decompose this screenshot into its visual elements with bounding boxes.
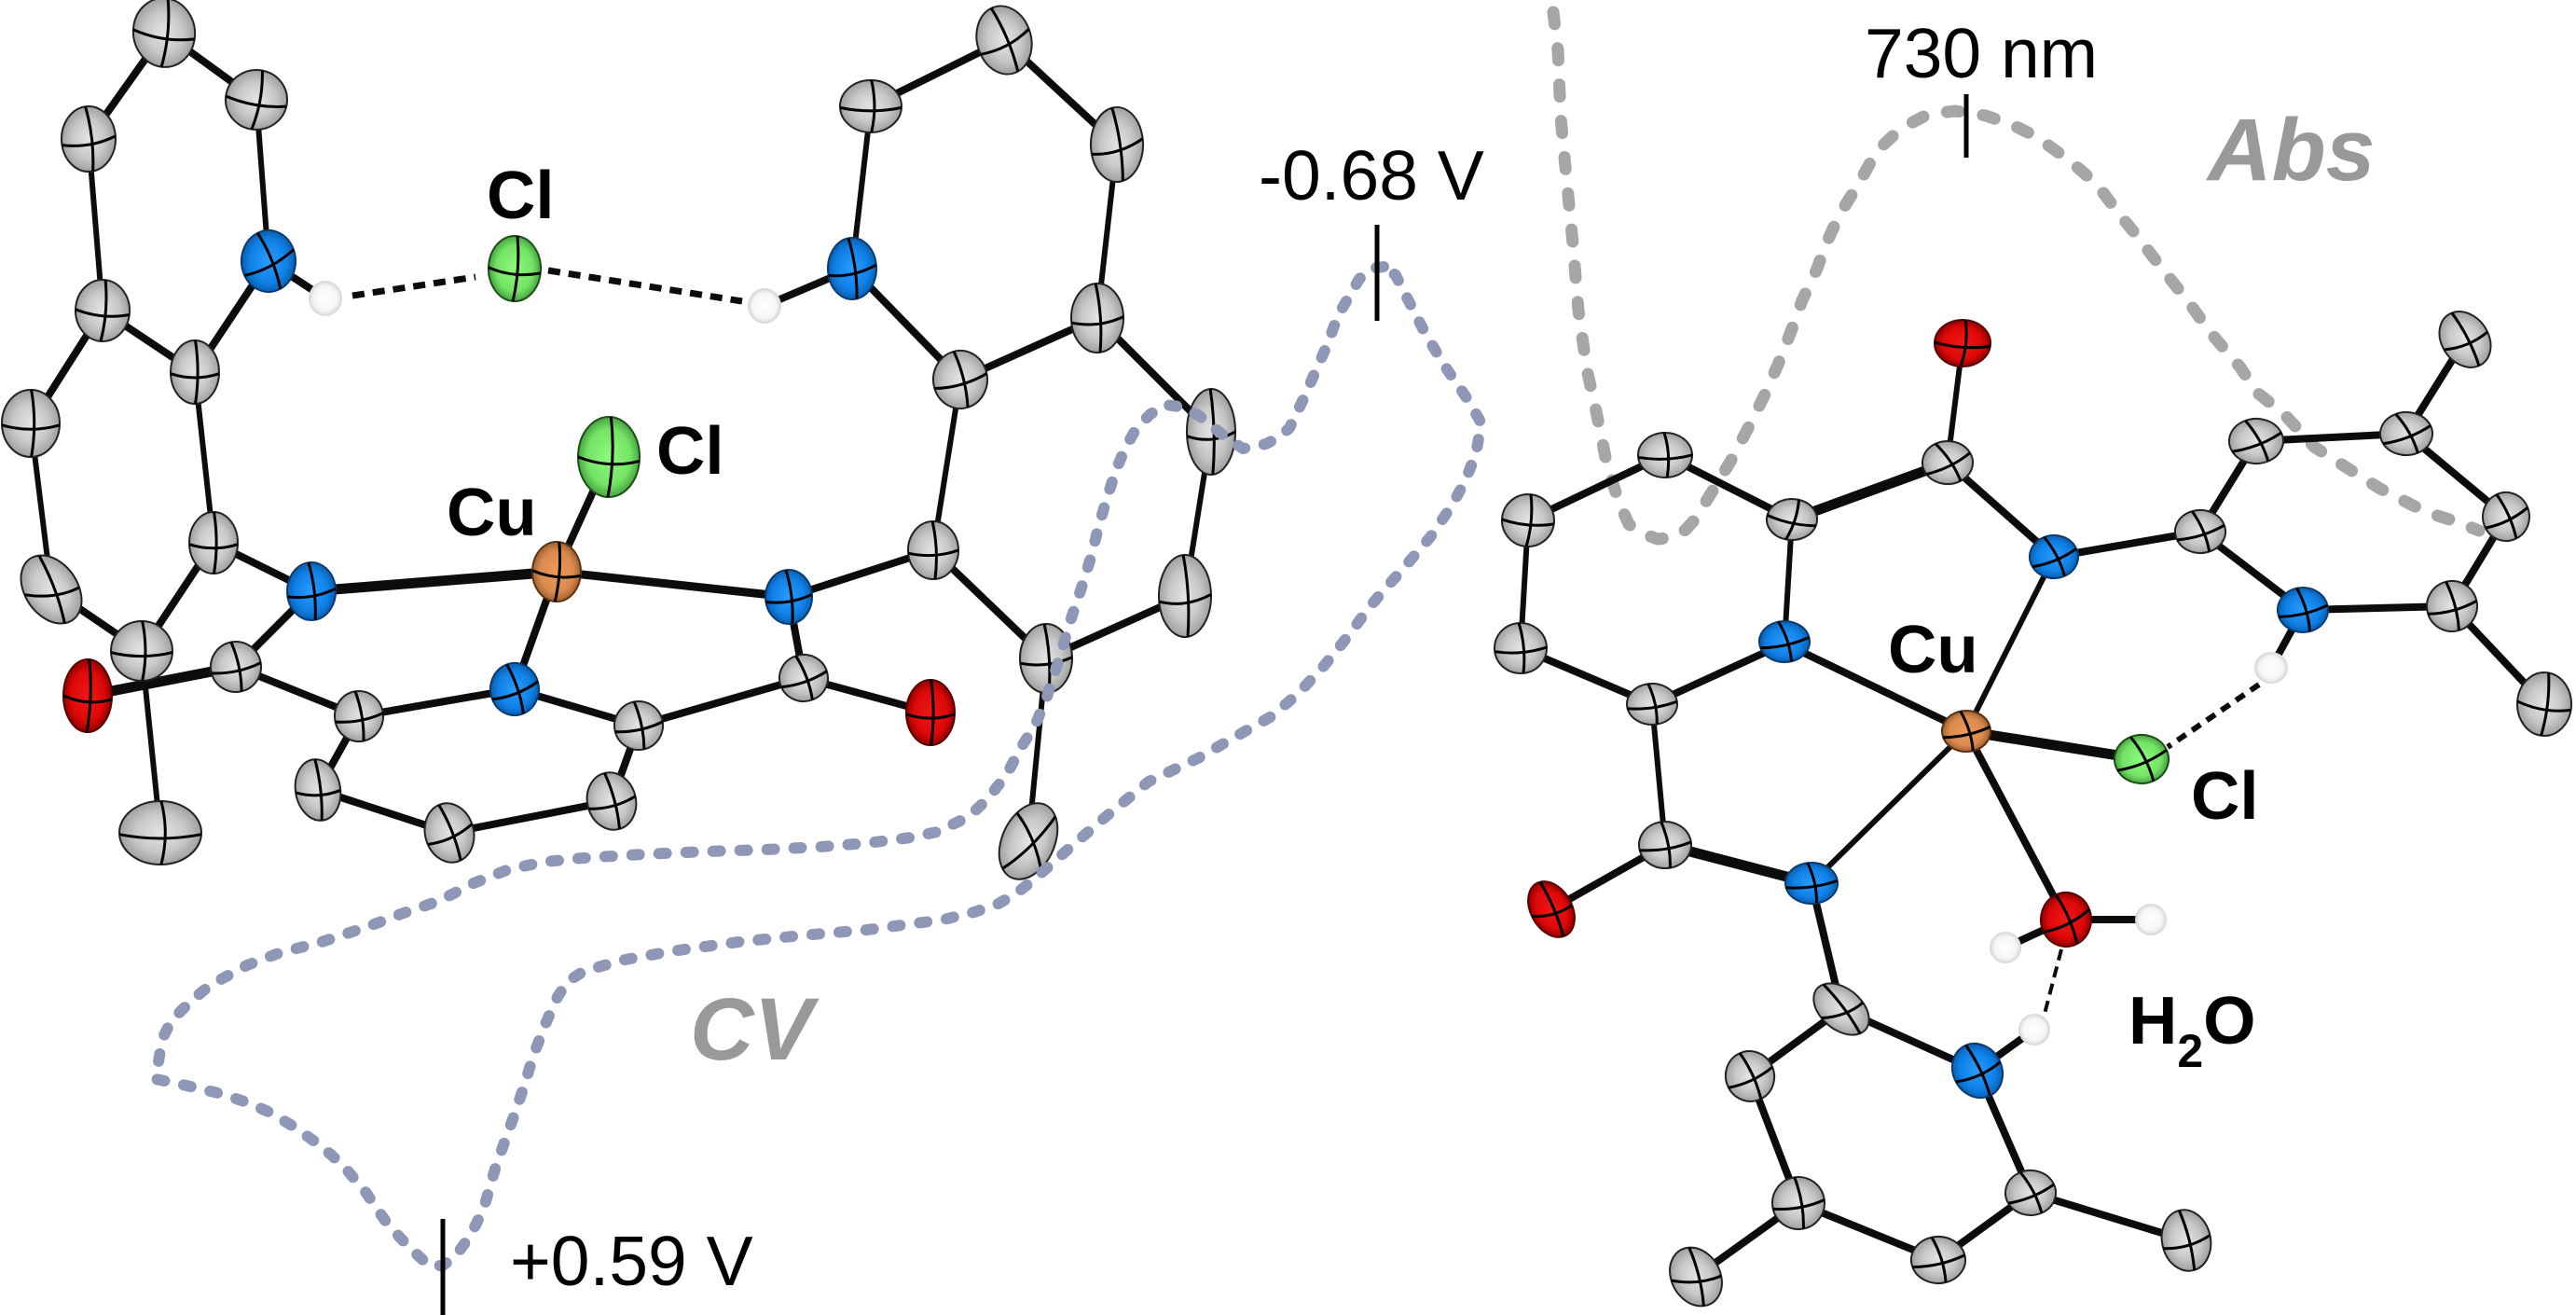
marker: +0.59 V tick <box>440 1219 446 1315</box>
label: H2O: O <box>2203 983 2256 1059</box>
left molecule bonds <box>31 33 1211 841</box>
label: bound Cl: Cl <box>656 413 723 489</box>
label: H2O: H <box>2128 983 2177 1059</box>
Abs spectrum trace <box>1553 12 2479 539</box>
right molecule bonds <box>1521 339 2544 1277</box>
marker: -0.68 V tick <box>1374 225 1380 321</box>
label: right Cu: Cu <box>1888 612 1978 687</box>
label: CV: CV <box>690 980 820 1079</box>
right molecule: Cu complex with water and chloride <box>1493 304 2575 1308</box>
label: left Cu: Cu <box>447 475 537 550</box>
left molecule: Cu complex with two chlorides <box>2 0 1236 895</box>
left molecule atoms <box>2 0 1236 895</box>
label: -0.68 V: -0.68 V <box>1259 136 1484 215</box>
label: +0.59 V: +0.59 V <box>510 1222 753 1300</box>
label: right Cl: Cl <box>2191 758 2258 834</box>
right molecule atoms <box>1493 304 2575 1308</box>
label: 730 nm: 730 nm <box>1865 14 2098 92</box>
label: outer Cl: Cl <box>487 158 554 233</box>
label: Abs: Abs <box>2206 101 2375 200</box>
CV trace <box>156 267 1481 1266</box>
left molecule hydrogen bonds <box>352 270 742 301</box>
label: H2O: 2 <box>2177 1025 2203 1077</box>
marker: 730 nm tick <box>1963 94 1969 158</box>
right molecule hydrogen bonds <box>2045 685 2259 1014</box>
